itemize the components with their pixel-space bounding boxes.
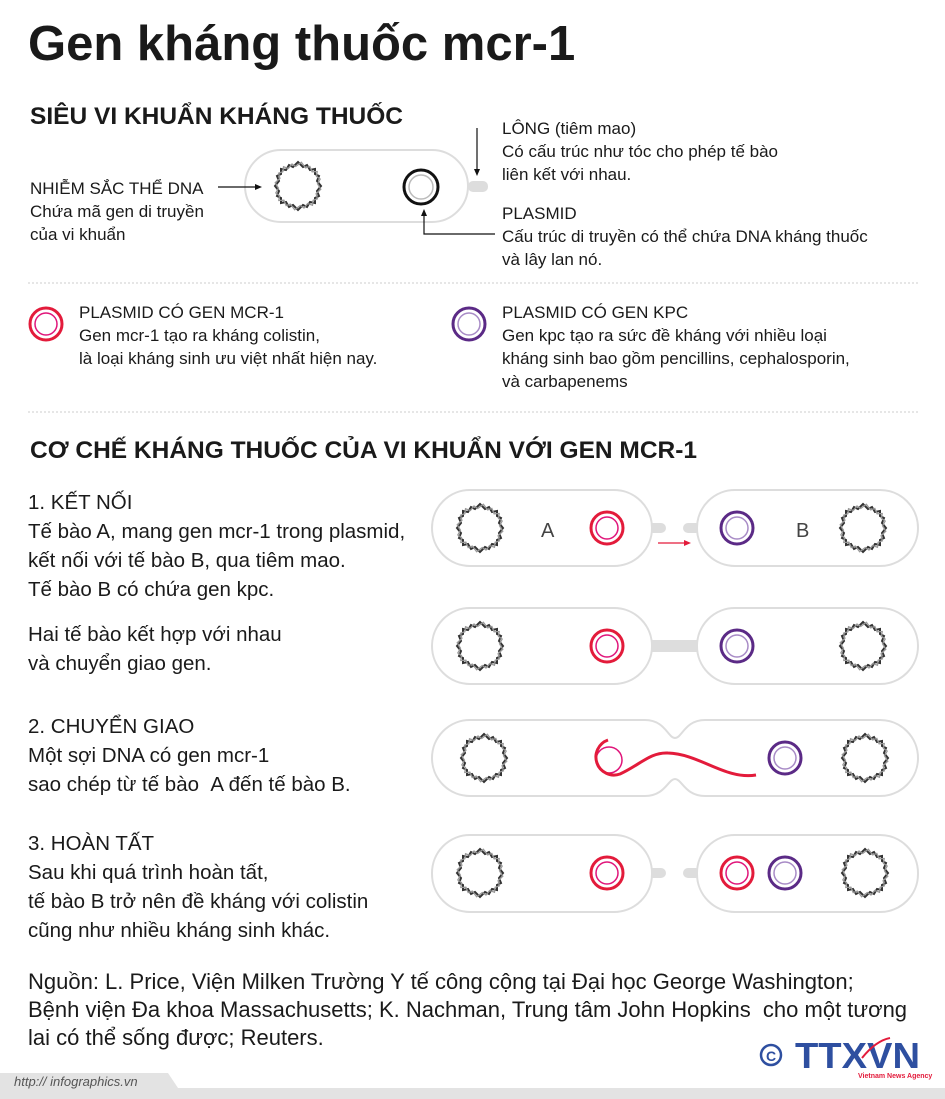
step 1b text bbox=[28, 623, 282, 675]
step 3 text bbox=[28, 832, 368, 942]
label: pili: LÔNG (tiêm mao) bbox=[502, 119, 636, 138]
legend text: mcr-1: là loại kháng sinh ưu việt nhất hiện nay. bbox=[79, 349, 377, 368]
label: plasmid: Cấu trúc di truyền có thể chứa DNA kháng thuốc bbox=[502, 227, 868, 246]
step 1 text: kết nối với tế bào B, qua tiêm mao. bbox=[28, 549, 346, 572]
label: plasmid: PLASMID bbox=[502, 204, 577, 223]
logo bbox=[761, 1035, 932, 1080]
diagram row 4: complete bbox=[432, 835, 918, 912]
diagram row 1: connection: B bbox=[796, 520, 809, 542]
logo: Vietnam News Agency bbox=[858, 1073, 932, 1080]
label: plasmid bbox=[502, 204, 868, 269]
step 3 text: Sau khi quá trình hoàn tất, bbox=[28, 861, 268, 884]
step 1 text: 1. KẾT NỐI bbox=[28, 491, 132, 514]
logo: TTXVN bbox=[795, 1035, 920, 1076]
step 2 text: Một sợi DNA có gen mcr-1 bbox=[28, 744, 269, 767]
label: pili: Có cấu trúc như tóc cho phép tế bào bbox=[502, 142, 778, 161]
legend icon: mcr-1 plasmid bbox=[30, 308, 62, 340]
step 3 text: tế bào B trở nên đề kháng với colistin bbox=[28, 890, 368, 913]
label: pili: liên kết với nhau. bbox=[502, 165, 631, 184]
step 1 text bbox=[28, 490, 405, 601]
step 1 text: Tế bào A, mang gen mcr-1 trong plasmid, bbox=[28, 520, 405, 543]
diagram row 1: connection: A bbox=[541, 520, 555, 542]
step 2 text: 2. CHUYỂN GIAO bbox=[28, 715, 194, 738]
diagram row 2: joined cells bbox=[432, 608, 918, 684]
legend text: mcr-1: Gen mcr-1 tạo ra kháng colistin, bbox=[79, 326, 320, 345]
label: DNA: Chứa mã gen di truyền bbox=[30, 202, 204, 221]
step 2 text: sao chép từ tế bào A đến tế bào B. bbox=[28, 773, 351, 796]
legend text: kpc: Gen kpc tạo ra sức đề kháng với nhiều loại bbox=[502, 326, 827, 345]
legend icon: kpc plasmid bbox=[453, 308, 485, 340]
legend text: kpc: kháng sinh bao gồm pencillins, cephalosporin, bbox=[502, 349, 850, 368]
legend text: mcr-1 bbox=[79, 303, 377, 368]
heading: super bacteria: SIÊU VI KHUẨN KHÁNG THUỐC bbox=[30, 103, 403, 130]
diagram row 1: connection bbox=[432, 490, 918, 566]
footer url: http:// infographics.vn bbox=[14, 1074, 138, 1089]
heading: mechanism: CƠ CHẾ KHÁNG THUỐC CỦA VI KHUẨN VỚI GEN MCR-1 bbox=[30, 437, 697, 464]
step 1b text: và chuyển giao gen. bbox=[28, 652, 212, 675]
legend text: mcr-1: PLASMID CÓ GEN MCR-1 bbox=[79, 303, 284, 322]
label: plasmid: và lây lan nó. bbox=[502, 250, 602, 269]
label: DNA bbox=[30, 179, 204, 244]
source: Nguồn: L. Price, Viện Milken Trường Y tế công cộng tại Đại học George Washington; bbox=[28, 969, 854, 994]
source: Bệnh viện Đa khoa Massachusetts; K. Nachman, Trung tâm John Hopkins cho một tương bbox=[28, 997, 907, 1022]
step 3 text: 3. HOÀN TẤT bbox=[28, 832, 154, 855]
step 1b text: Hai tế bào kết hợp với nhau bbox=[28, 623, 282, 646]
title: Gen kháng thuốc mcr-1 bbox=[28, 17, 575, 71]
legend text: kpc: và carbapenems bbox=[502, 372, 628, 391]
source: lai có thể sống được; Reuters. bbox=[28, 1025, 324, 1050]
label: DNA: của vi khuẩn bbox=[30, 225, 125, 244]
label: pili bbox=[502, 119, 778, 184]
source bbox=[28, 969, 907, 1050]
step 2 text bbox=[28, 714, 351, 796]
logo: C bbox=[766, 1048, 776, 1064]
legend text: kpc: PLASMID CÓ GEN KPC bbox=[502, 303, 688, 322]
diagram: bacterium anatomy bbox=[218, 128, 495, 234]
legend text: kpc bbox=[502, 303, 850, 391]
diagram row 3: transfer bbox=[432, 720, 918, 796]
step 1 text: Tế bào B có chứa gen kpc. bbox=[28, 578, 274, 601]
footer bar bbox=[0, 1073, 945, 1099]
label: DNA: NHIỄM SẮC THỂ DNA bbox=[30, 179, 204, 198]
step 3 text: cũng như nhiều kháng sinh khác. bbox=[28, 919, 330, 942]
